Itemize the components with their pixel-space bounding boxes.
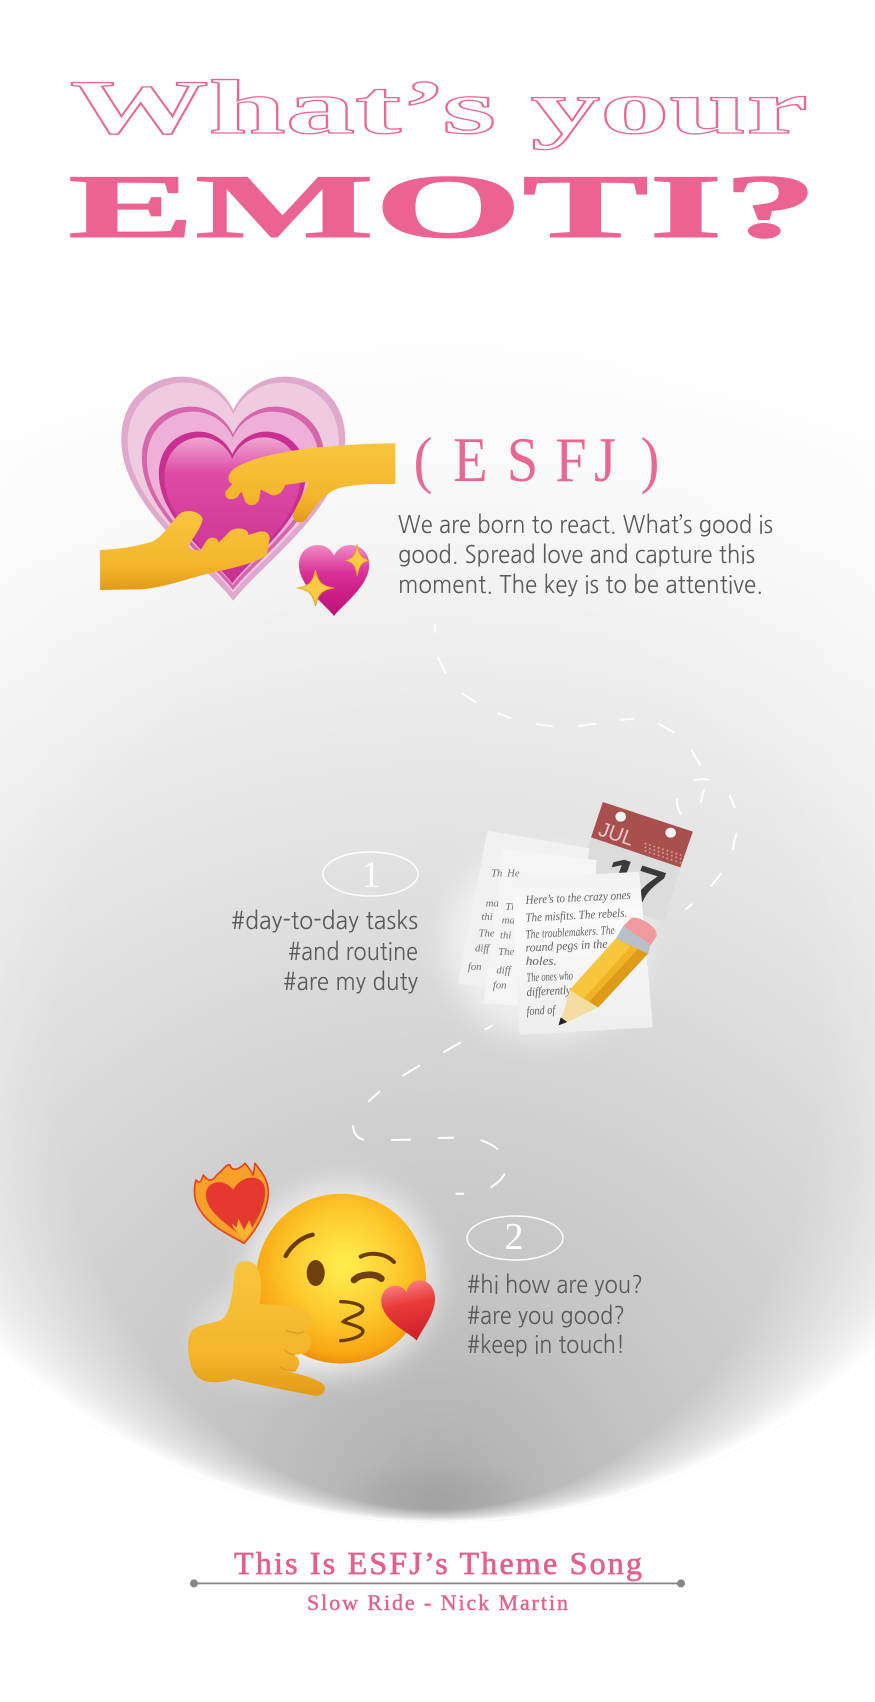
stacked pages: thi: [500, 931, 511, 941]
stacked pages: fon: [468, 962, 482, 973]
upper hand: [225, 443, 395, 522]
stacked pages: Th: [505, 902, 517, 913]
calendar: JUL: [595, 818, 637, 850]
title: EMOTI?: EMOTI?: [68, 156, 818, 257]
stacked pages: [458, 831, 596, 1010]
calendar: [571, 802, 693, 922]
front page: [512, 872, 653, 1035]
front page: Here’s to the crazy ones: [524, 888, 631, 907]
front page: The ones who: [526, 969, 573, 985]
front page: The misfits. The rebels.: [525, 906, 628, 925]
description text: [398, 513, 773, 597]
stacked pages: ma: [486, 899, 499, 910]
fire heart: [194, 1163, 268, 1243]
hashtags 2: #keep in touch!: [467, 1333, 625, 1357]
description text: We are born to react. What’s good is: [398, 513, 773, 537]
hashtags 1: [231, 909, 418, 994]
hashtags 1: #and routine: [288, 940, 418, 964]
hashtags 2: #hi how are you?: [467, 1273, 643, 1297]
hashtags 2: [467, 1273, 643, 1357]
front page: holes.: [526, 954, 557, 968]
icon: blowing-kiss face with call-me hand and fire heart: [188, 1163, 443, 1396]
icon: heart with reaching hands: [100, 377, 395, 601]
stacked pages: fon: [493, 981, 507, 991]
hashtags 1: #are my duty: [283, 970, 418, 994]
stacked pages: diff: [475, 944, 491, 955]
stacked pages: The: [479, 929, 495, 940]
divider line with end dots: [190, 1579, 685, 1587]
icon: calendar and notes with pencil: [458, 802, 693, 1035]
badge 1: [323, 852, 418, 896]
stacked pages: thi: [481, 912, 493, 923]
calendar: 17: [596, 845, 672, 916]
badge 1: 1: [362, 854, 380, 896]
stacked pages: He: [506, 869, 520, 880]
hashtags 2: #are you good?: [467, 1304, 625, 1328]
pencil: [559, 917, 657, 1025]
stacked pages: diff: [496, 966, 513, 976]
growing heart: [121, 377, 345, 601]
front page: The troublemakers. The: [525, 923, 615, 941]
face: [256, 1194, 426, 1364]
title: What's your: What’s your: [70, 64, 808, 150]
icon: small sparkling heart: [298, 544, 369, 616]
stacked pages: The: [498, 947, 515, 958]
call-me hand: [188, 1261, 325, 1396]
dashed path connector: [353, 625, 736, 1194]
theme song title: This Is ESFJ’s Theme Song: [234, 1545, 642, 1581]
stacked pages: Th: [491, 869, 502, 880]
badge 2: [467, 1216, 563, 1260]
front page: fond of: [526, 1003, 557, 1018]
badge 2: 2: [504, 1216, 524, 1258]
front page: differently.: [526, 983, 573, 999]
hashtags 1: #day-to-day tasks: [231, 909, 418, 933]
stacked pages: ma: [502, 916, 515, 926]
lower hand: [100, 511, 270, 590]
front page: round pegs in the: [525, 937, 608, 955]
heading: (ESFJ): (ESFJ): [414, 425, 659, 496]
kiss heart: [378, 1278, 443, 1346]
song name: Slow Ride - Nick Martin: [307, 1590, 568, 1615]
description text: moment. The key is to be attentive.: [398, 573, 763, 597]
description text: good. Spread love and capture this: [398, 543, 755, 567]
